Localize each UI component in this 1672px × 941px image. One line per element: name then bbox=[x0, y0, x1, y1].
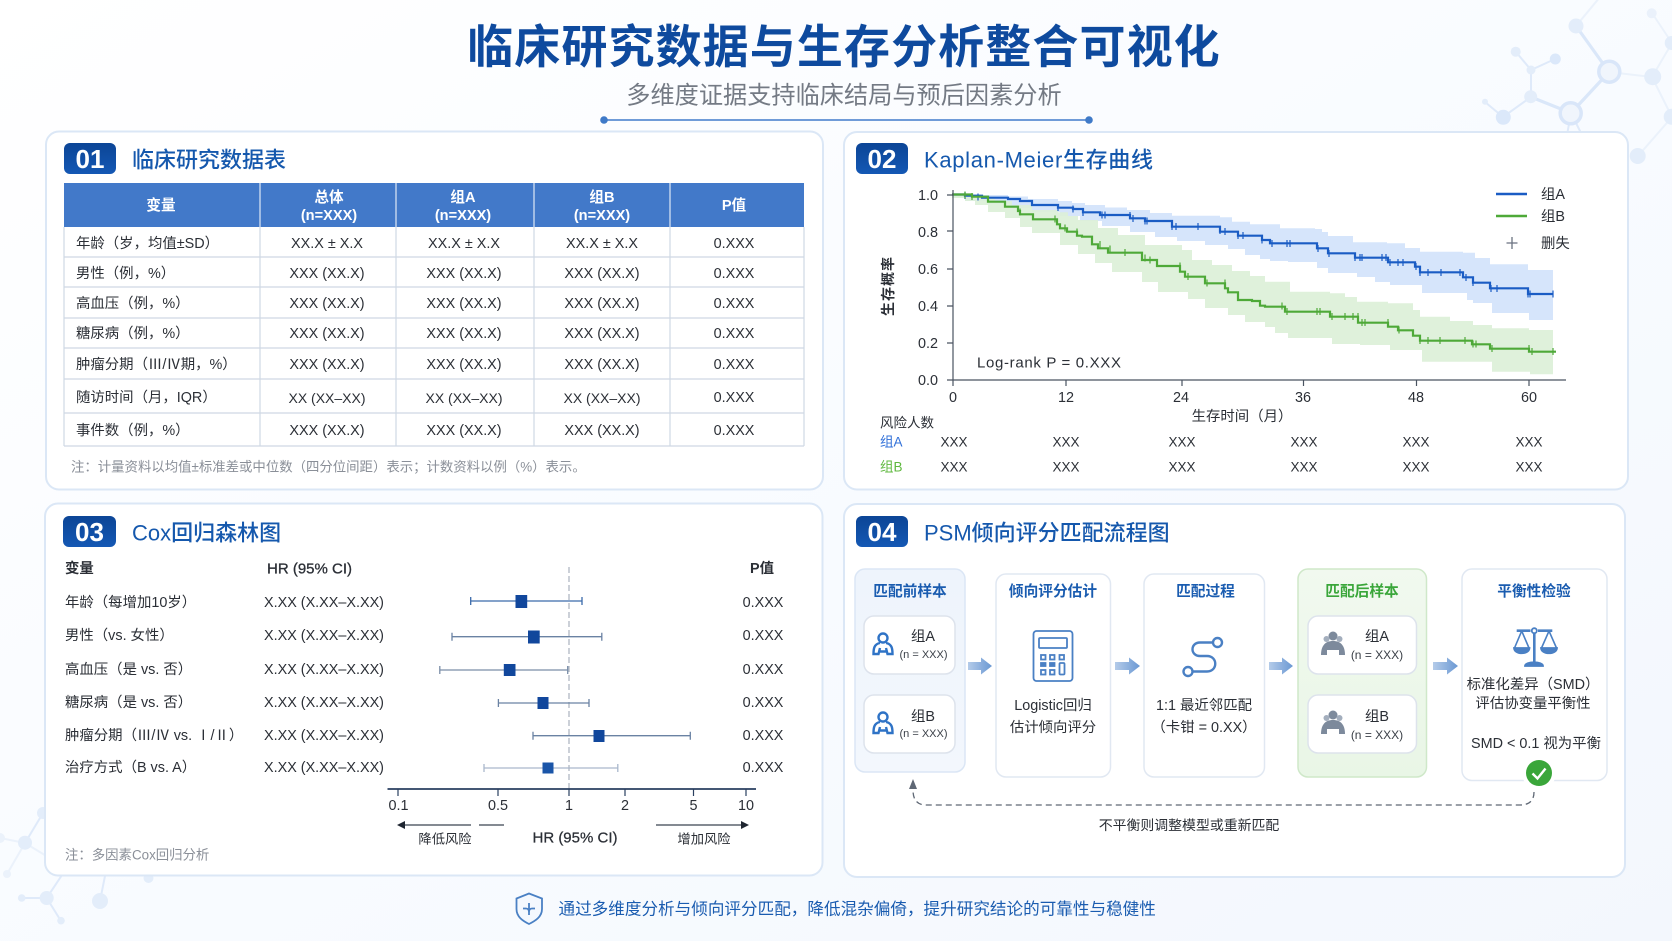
forest note: 注：多因素Cox回归分析 bbox=[65, 846, 209, 862]
HR axis: 0.5 bbox=[488, 798, 508, 814]
badge 01 bbox=[64, 143, 116, 174]
table: 组A bbox=[450, 189, 476, 206]
panel: Cox forest plot bbox=[45, 504, 822, 876]
x tick labels: 12 bbox=[1058, 390, 1074, 406]
table: XXX (XX.X) bbox=[564, 296, 640, 312]
forest row labels: X.XX (X.XX–X.XX) bbox=[264, 628, 384, 644]
icon: route bbox=[1184, 638, 1222, 676]
feedback loop arrow bbox=[909, 779, 1534, 805]
table: XXX (XX.X) bbox=[426, 266, 502, 282]
table bbox=[64, 183, 804, 446]
legend: 组A bbox=[1541, 186, 1565, 203]
log-rank label: Log-rank P = 0.XXX bbox=[977, 354, 1121, 372]
card: group A: 组A bbox=[1365, 628, 1389, 645]
card: group A: (n = XXX) bbox=[1351, 648, 1403, 662]
table: XX.X ± X.X bbox=[291, 236, 363, 252]
legend: 组B bbox=[1541, 208, 1565, 225]
step: propensity score estimation: Logistic回归 bbox=[1014, 697, 1092, 714]
arrow bbox=[1269, 658, 1293, 674]
table: XXX (XX.X) bbox=[564, 357, 640, 373]
risk table: XXX bbox=[1052, 434, 1080, 450]
confidence bands and curves bbox=[952, 192, 1556, 374]
panel: Kaplan-Meier curves bbox=[844, 132, 1628, 490]
arrow bbox=[968, 658, 992, 674]
table: 0.XXX bbox=[714, 296, 755, 312]
forest row labels: 0.XXX bbox=[743, 595, 784, 611]
table: (n=XXX) bbox=[301, 208, 357, 224]
icon: calculator bbox=[1034, 631, 1072, 681]
icon: people bbox=[1321, 710, 1345, 734]
y tick labels: 0.2 bbox=[918, 336, 938, 352]
forest plot bbox=[440, 567, 690, 789]
badge 02: 02 bbox=[868, 144, 896, 174]
table: XX (XX–XX) bbox=[425, 390, 503, 406]
subtitle: 多维度证据支持临床结局与预后因素分析 bbox=[626, 82, 1062, 110]
forest row labels: 0.XXX bbox=[743, 760, 784, 776]
HR axis bbox=[388, 789, 756, 814]
x tick labels: 60 bbox=[1521, 390, 1537, 406]
x tick labels: 24 bbox=[1173, 390, 1189, 406]
y tick labels: 0.4 bbox=[918, 299, 938, 315]
heading: table: 临床研究数据表 bbox=[132, 148, 286, 172]
table: 0.XXX bbox=[714, 357, 755, 373]
table: XX.X ± X.X bbox=[566, 236, 638, 252]
forest row labels: 糖尿病（是 vs. 否） bbox=[65, 694, 192, 711]
card: group B bbox=[1308, 695, 1416, 753]
HR axis: 2 bbox=[621, 798, 629, 814]
arrow bbox=[1115, 658, 1140, 674]
x tick labels: 0 bbox=[949, 390, 957, 406]
table: XX (XX–XX) bbox=[563, 390, 641, 406]
heading: forest: Cox回归森林图 bbox=[132, 520, 281, 546]
heading: KM: Kaplan-Meier生存曲线 bbox=[924, 148, 1153, 172]
table: XXX (XX.X) bbox=[564, 423, 640, 439]
forest column headers bbox=[65, 559, 774, 578]
arrow: higher risk: 增加风险 bbox=[677, 832, 731, 846]
step: samples after matching bbox=[1298, 569, 1426, 777]
table: XXX (XX.X) bbox=[426, 326, 502, 342]
table: 年龄（岁，均值±SD） bbox=[76, 235, 219, 252]
forest row labels: 男性（vs. 女性） bbox=[65, 626, 174, 644]
axis label: HR: HR (95% CI) bbox=[532, 830, 618, 846]
step: balance check: 平衡性检验 bbox=[1497, 582, 1571, 600]
badge 02 bbox=[856, 143, 908, 174]
table: 0.XXX bbox=[714, 266, 755, 282]
risk table: XXX bbox=[1402, 460, 1430, 474]
table: XX (XX–XX) bbox=[288, 390, 366, 406]
table: XXX (XX.X) bbox=[426, 357, 502, 373]
step: propensity score estimation: 估计倾向评分 bbox=[1010, 719, 1096, 736]
decoration: molecule bottom left bbox=[0, 807, 154, 924]
footer conclusion: 通过多维度分析与倾向评分匹配，降低混杂偏倚，提升研究结论的可靠性与稳健性 bbox=[558, 900, 1156, 918]
step: balance check: SMD < 0.1 视为平衡 bbox=[1471, 735, 1601, 752]
forest row labels: X.XX (X.XX–X.XX) bbox=[264, 595, 384, 611]
table: 男性（例，%） bbox=[76, 265, 175, 282]
step: matching process bbox=[1144, 574, 1264, 777]
y tick labels: 0.8 bbox=[918, 225, 938, 241]
table note: 注：计量资料以均值±标准差或中位数（四分位间距）表示；计数资料以例（%）表示。 bbox=[71, 460, 586, 476]
step: balance check bbox=[1462, 569, 1607, 790]
card: group B: 组B bbox=[1365, 708, 1389, 725]
table: XXX (XX.X) bbox=[426, 423, 502, 439]
forest row labels: 肿瘤分期（Ⅲ/Ⅳ vs. Ⅰ/Ⅱ） bbox=[65, 727, 243, 744]
HR axis: 1 bbox=[565, 798, 573, 814]
badge 03 bbox=[63, 516, 116, 547]
table: 0.XXX bbox=[714, 423, 755, 439]
step: samples after matching: 匹配后样本 bbox=[1325, 582, 1399, 600]
table: XXX (XX.X) bbox=[289, 266, 365, 282]
HR axis: 0.1 bbox=[388, 798, 409, 814]
risk table: XXX bbox=[1052, 460, 1080, 474]
forest row labels: X.XX (X.XX–X.XX) bbox=[264, 695, 384, 711]
decoration: molecule top right bbox=[1482, 0, 1672, 164]
arrow: higher risk bbox=[656, 821, 749, 846]
card: group A: 组A bbox=[911, 628, 935, 645]
badge 04 bbox=[856, 516, 908, 547]
step: balance check: 标准化差异（SMD） bbox=[1467, 676, 1599, 693]
forest row labels: 0.XXX bbox=[743, 628, 784, 644]
table: 事件数（例，%） bbox=[76, 422, 190, 439]
x tick labels: 36 bbox=[1295, 390, 1311, 406]
y tick labels: 1.0 bbox=[918, 188, 938, 204]
risk table: XXX bbox=[1168, 460, 1196, 474]
forest row labels: 0.XXX bbox=[743, 695, 784, 711]
y tick labels bbox=[918, 188, 938, 389]
x axis title: 生存时间（月） bbox=[1192, 408, 1292, 425]
table: XXX (XX.X) bbox=[426, 296, 502, 312]
table: 0.XXX bbox=[714, 236, 755, 252]
y tick labels: 0.0 bbox=[918, 373, 938, 389]
title: 临床研究数据与生存分析整合可视化 bbox=[467, 21, 1221, 73]
risk table: XXX bbox=[1515, 460, 1543, 474]
panel: clinical data table bbox=[46, 132, 823, 490]
feedback label: 不平衡则调整模型或重新匹配 bbox=[1099, 817, 1279, 833]
y tick labels: 0.6 bbox=[918, 262, 938, 278]
HR axis: 10 bbox=[738, 798, 754, 814]
forest row labels: 治疗方式（B vs. A） bbox=[65, 759, 196, 776]
icon: check bbox=[1522, 756, 1556, 790]
card: group B bbox=[864, 695, 955, 753]
risk table: XXX bbox=[940, 460, 968, 474]
risk table: XXX bbox=[940, 434, 968, 450]
x tick labels: 48 bbox=[1408, 390, 1424, 406]
risk table bbox=[880, 416, 1543, 474]
table: (n=XXX) bbox=[435, 208, 491, 224]
risk table: 风险人数 bbox=[880, 416, 934, 430]
HR axis: 5 bbox=[689, 798, 698, 814]
title underline bbox=[600, 116, 1093, 124]
risk table: XXX bbox=[1168, 434, 1196, 450]
step: samples before matching bbox=[855, 569, 965, 772]
risk table: 组B bbox=[880, 460, 903, 474]
arrow bbox=[1433, 658, 1458, 674]
panel: PSM flow bbox=[844, 504, 1625, 877]
step: propensity score estimation: 倾向评分估计 bbox=[1009, 583, 1097, 600]
icon: scale bbox=[1514, 628, 1557, 666]
card: group A bbox=[1308, 616, 1416, 674]
table: (n=XXX) bbox=[574, 208, 630, 224]
badge 04: 04 bbox=[868, 517, 897, 547]
icon: person bbox=[874, 634, 892, 654]
step: matching process: 匹配过程 bbox=[1176, 583, 1235, 600]
risk table: XXX bbox=[1402, 434, 1430, 450]
forest row labels: X.XX (X.XX–X.XX) bbox=[264, 760, 384, 776]
card: group B: 组B bbox=[911, 708, 935, 725]
forest row labels: X.XX (X.XX–X.XX) bbox=[264, 662, 384, 678]
table: 高血压（例，%） bbox=[76, 295, 190, 312]
forest row labels: 年龄（每增加10岁） bbox=[65, 594, 196, 611]
axes bbox=[947, 190, 1566, 386]
table: XXX (XX.X) bbox=[289, 423, 365, 439]
legend: 删失 bbox=[1541, 235, 1570, 252]
badge 01: 01 bbox=[76, 144, 104, 174]
arrow: lower risk bbox=[397, 821, 504, 846]
table: 组B bbox=[589, 189, 615, 206]
risk table: 组A bbox=[880, 434, 903, 450]
legend bbox=[1496, 186, 1570, 252]
step: matching process: 1:1 最近邻匹配 bbox=[1156, 697, 1252, 714]
forest column headers: 变量 bbox=[65, 559, 94, 577]
arrow: lower risk: 降低风险 bbox=[418, 832, 472, 846]
icon: person bbox=[874, 712, 892, 733]
badge 03: 03 bbox=[75, 517, 104, 547]
step: samples before matching: 匹配前样本 bbox=[873, 582, 947, 600]
risk table: XXX bbox=[1290, 434, 1318, 450]
table: XXX (XX.X) bbox=[564, 266, 640, 282]
icon: people bbox=[1321, 632, 1345, 655]
forest row labels bbox=[65, 594, 784, 776]
step: matching process: （卡钳 = 0.XX） bbox=[1151, 719, 1257, 736]
card: group A bbox=[864, 616, 955, 674]
risk table: XXX bbox=[1515, 434, 1543, 450]
table: XXX (XX.X) bbox=[289, 326, 365, 342]
step: propensity score estimation bbox=[996, 574, 1110, 777]
table: 变量 bbox=[146, 196, 176, 214]
heading: PSM: PSM倾向评分匹配流程图 bbox=[924, 520, 1170, 546]
x tick labels bbox=[949, 390, 1537, 406]
survival chart bbox=[880, 186, 1570, 425]
table: 糖尿病（例，%） bbox=[76, 325, 190, 342]
forest row labels: X.XX (X.XX–X.XX) bbox=[264, 728, 384, 744]
risk table: XXX bbox=[1290, 460, 1318, 474]
step: balance check: 评估协变量平衡性 bbox=[1475, 695, 1591, 712]
table: XX.X ± X.X bbox=[428, 236, 500, 252]
table: 肿瘤分期（Ⅲ/Ⅳ期，%） bbox=[76, 356, 237, 373]
forest row labels: 高血压（是 vs. 否） bbox=[65, 661, 192, 678]
forest row labels: 0.XXX bbox=[743, 662, 784, 678]
y axis title: 生存概率 bbox=[880, 256, 896, 316]
table: 随访时间（月，IQR） bbox=[76, 389, 217, 406]
forest row labels: 0.XXX bbox=[743, 728, 784, 744]
card: group B: (n = XXX) bbox=[900, 728, 948, 740]
table: 0.XXX bbox=[714, 326, 755, 342]
table: P值 bbox=[722, 197, 747, 214]
table: XXX (XX.X) bbox=[289, 357, 365, 373]
footer conclusion bbox=[516, 894, 1156, 924]
table: XXX (XX.X) bbox=[289, 296, 365, 312]
card: group B: (n = XXX) bbox=[1351, 728, 1403, 742]
card: group A: (n = XXX) bbox=[900, 649, 948, 661]
table: 总体 bbox=[314, 188, 344, 206]
icon: shield bbox=[516, 894, 542, 924]
forest column headers: HR (95% CI) bbox=[267, 560, 352, 578]
forest column headers: P值 bbox=[750, 560, 774, 577]
table: XXX (XX.X) bbox=[564, 326, 640, 342]
table: 0.XXX bbox=[714, 390, 755, 406]
